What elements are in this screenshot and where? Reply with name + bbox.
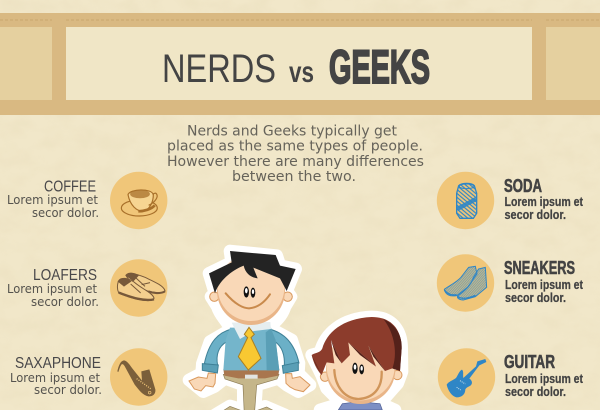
title: GEEKS <box>329 40 430 93</box>
nerd item: saxaphone <box>10 348 167 406</box>
nerd tie <box>238 327 261 370</box>
icon: sneakers <box>444 266 487 300</box>
nerd item: loafers <box>7 259 167 317</box>
intro text: Nerds and Geeks typically get <box>187 124 398 140</box>
icon: loafers <box>117 273 165 301</box>
intro text: However there are many differences <box>167 154 424 170</box>
geek item: soda: SODA <box>504 176 542 196</box>
nerd legs <box>217 369 282 410</box>
icon: electric guitar <box>447 359 486 397</box>
icon: saxophone <box>117 360 155 396</box>
nerd item: saxaphone: SAXAPHONE <box>15 355 101 372</box>
intro text: between the two. <box>232 169 356 185</box>
geek item: guitar: Lorem ipsum et <box>505 372 584 386</box>
character: nerd <box>189 251 310 410</box>
nerd item: coffee: Lorem ipsum et <box>7 193 98 207</box>
nerd item: loafers: Lorem ipsum et <box>7 282 97 296</box>
nerd arms <box>202 329 299 373</box>
geek item: soda <box>437 172 584 229</box>
geek hair <box>312 317 402 375</box>
geek sticker outline <box>312 317 402 410</box>
geek item: soda: secor dolor. <box>504 208 566 222</box>
nerd item: coffee: COFFEE <box>44 178 96 196</box>
intro text <box>167 124 424 185</box>
character: geek <box>312 317 402 410</box>
title: NERDS <box>162 47 276 91</box>
nerd item: loafers: secor dolor. <box>31 295 99 309</box>
nerd sticker outline <box>189 251 310 410</box>
icon: coffee cup <box>121 190 157 216</box>
geek shirt <box>338 402 382 410</box>
geek item: soda: Lorem ipsum et <box>504 195 584 209</box>
geek item: guitar: secor dolor. <box>505 385 566 399</box>
nerd item: saxaphone: secor dolor. <box>34 383 102 397</box>
icon: soda can <box>457 183 477 218</box>
intro text: placed as the same types of people. <box>167 138 423 154</box>
nerd item: loafers: LOAFERS <box>33 267 97 284</box>
geek head <box>312 317 402 404</box>
nerd item: saxaphone: Lorem ipsum et <box>10 371 100 385</box>
nerd hair <box>209 251 296 293</box>
header banner <box>0 13 600 115</box>
nerd hands <box>189 373 310 392</box>
nerd item: coffee: secor dolor. <box>32 206 99 220</box>
nerd torso <box>223 322 279 370</box>
geek item: sneakers: secor dolor. <box>505 291 566 305</box>
nerd head <box>209 251 296 325</box>
geek item: guitar <box>438 348 584 406</box>
title <box>162 40 430 93</box>
geek item: sneakers: Lorem ipsum et <box>505 278 584 292</box>
nerd item: coffee <box>7 172 167 229</box>
title: vs <box>289 56 314 89</box>
geek item: guitar: GUITAR <box>504 352 555 372</box>
geek item: sneakers <box>437 254 584 312</box>
